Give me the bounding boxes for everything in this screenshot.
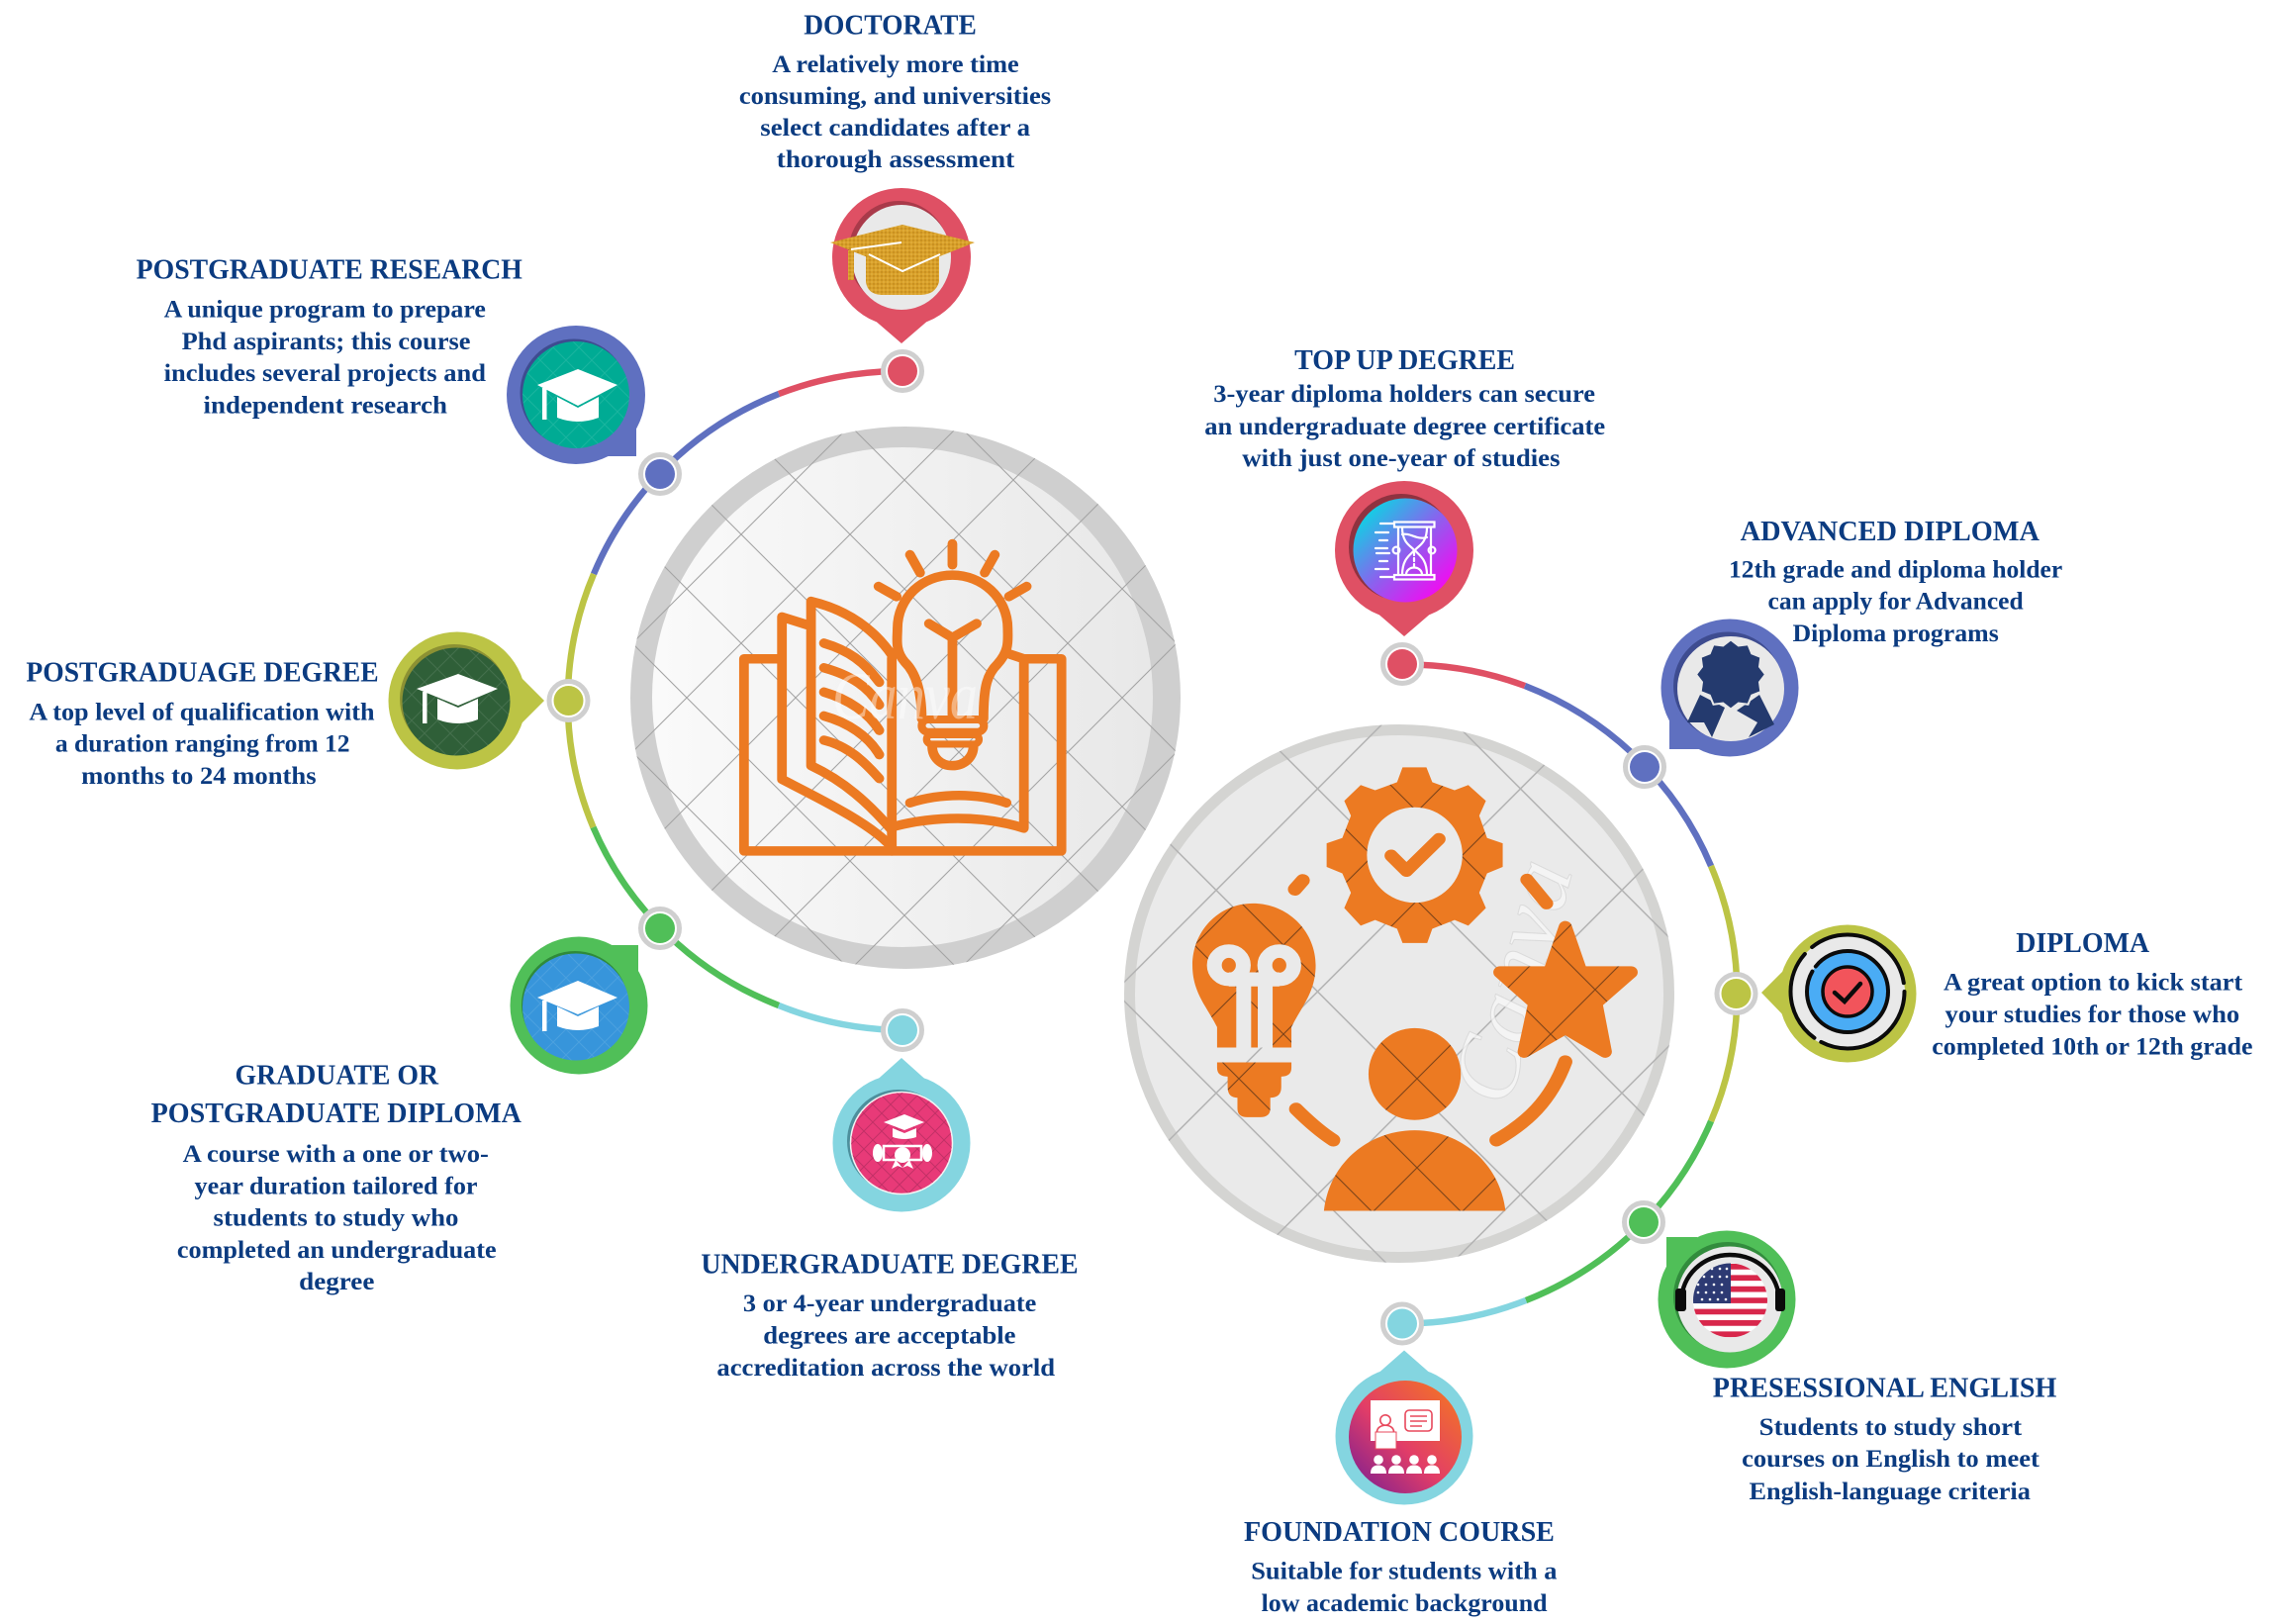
icon: flag in circle xyxy=(1692,1263,1769,1340)
text block: graduate or postgraduate diploma xyxy=(151,1060,522,1295)
text block: postgraduage degree: months to 24 months xyxy=(81,761,317,790)
pin: postgraduate research cap xyxy=(507,326,645,464)
text block: undergraduate degree: degrees are acceptable xyxy=(763,1321,1016,1350)
pin: diploma target xyxy=(1761,924,1916,1063)
text block: postgraduate research: independent research xyxy=(204,390,447,419)
pin: presessional english flag and headset xyxy=(1659,1231,1795,1368)
text block: doctorate: A relatively more time xyxy=(772,49,1019,78)
text block: top up degree: an undergraduate degree certificate xyxy=(1204,412,1605,440)
text block: graduate or postgraduate diploma: completed an undergraduate xyxy=(177,1235,497,1264)
icon: white graduation cap xyxy=(537,369,617,422)
text block: undergraduate degree xyxy=(701,1250,1079,1382)
text block: foundation course: low academic background xyxy=(1262,1588,1548,1617)
text block: postgraduage degree: A top level of qualification with xyxy=(29,697,375,725)
text block: foundation course: Suitable for students with a xyxy=(1251,1557,1558,1585)
pin: foundation course classroom xyxy=(1336,1350,1472,1504)
text block: graduate or postgraduate diploma: POSTGRADUATE DIPLOMA xyxy=(151,1099,522,1129)
text block: doctorate: DOCTORATE xyxy=(804,10,977,41)
text block: presessional english: Students to study short xyxy=(1759,1412,2023,1441)
text block: doctorate xyxy=(739,10,1051,173)
pin: undergraduate degree xyxy=(833,1058,970,1211)
text block: postgraduage degree: POSTGRADUAGE DEGREE xyxy=(26,658,379,689)
text block: doctorate: thorough assessment xyxy=(777,144,1015,173)
icon: gear with check xyxy=(1327,767,1503,943)
text block: diploma: completed 10th or 12th grade xyxy=(1932,1031,2252,1060)
icon: white graduation cap xyxy=(537,981,617,1031)
icon: open book with light bulb xyxy=(744,543,1062,851)
text block: graduate or postgraduate diploma: degree xyxy=(299,1267,374,1295)
text block: presessional english: English-language criteria xyxy=(1750,1477,2031,1505)
text block: postgraduate research: includes several projects and xyxy=(164,358,486,387)
text block: diploma: DIPLOMA xyxy=(2016,928,2149,959)
icon: target with check xyxy=(1791,934,1904,1049)
watermark: Canva: Canva xyxy=(832,658,978,733)
text block: graduate or postgraduate diploma: students to study who xyxy=(214,1202,458,1231)
left timeline arc xyxy=(568,371,902,1030)
text block: top up degree: TOP UP DEGREE xyxy=(1294,345,1515,376)
text block: graduate or postgraduate diploma: GRADUATE OR xyxy=(235,1060,439,1091)
icon: rosette xyxy=(1687,639,1774,737)
text block: doctorate: consuming, and universities xyxy=(739,81,1051,110)
icon: hourglass xyxy=(1375,523,1435,580)
text block: postgraduage degree: a duration ranging from 12 xyxy=(55,729,350,758)
text block: diploma: A great option to kick start xyxy=(1944,967,2243,996)
text block: advanced diploma xyxy=(1729,517,2062,647)
icon: person xyxy=(1324,1028,1505,1211)
icon: classroom teacher and audience xyxy=(1371,1400,1440,1474)
text block: top up degree: with just one-year of studies xyxy=(1242,443,1561,472)
text block: presessional english: courses on English to meet xyxy=(1742,1444,2039,1473)
pin: graduate or postgraduate diploma cap xyxy=(511,936,647,1075)
watermark: Canva rotated: Canva xyxy=(1431,848,1592,1113)
text block: undergraduate degree: UNDERGRADUATE DEGREE xyxy=(701,1250,1079,1281)
pin: postgraduate degree cap xyxy=(388,631,544,770)
text block: doctorate: select candidates after a xyxy=(760,113,1030,142)
text block: advanced diploma: 12th grade and diploma holder xyxy=(1729,554,2062,583)
text block: postgraduage degree xyxy=(26,658,379,790)
text block: postgraduate research xyxy=(137,255,522,419)
text block: graduate or postgraduate diploma: A course with a one or two- xyxy=(183,1139,489,1168)
icon: gear with check, bulb, star and person xyxy=(1192,767,1631,1211)
right timeline arc xyxy=(1402,664,1737,1324)
text block: presessional english xyxy=(1713,1374,2057,1505)
icon: gold graduation cap xyxy=(830,225,975,295)
text block: diploma xyxy=(1932,928,2252,1060)
text block: undergraduate degree: accreditation across the world xyxy=(716,1353,1055,1382)
text block: top up degree xyxy=(1204,345,1605,472)
text block: graduate or postgraduate diploma: year duration tailored for xyxy=(195,1171,478,1199)
pin: advanced diploma rosette xyxy=(1660,620,1799,756)
icon: star xyxy=(1500,927,1631,1052)
text block: undergraduate degree: 3 or 4-year undergraduate xyxy=(743,1289,1036,1317)
pin: top up degree hourglass xyxy=(1335,481,1473,636)
panel: left central circle with book and bulb xyxy=(630,427,1181,969)
icon: cap and scroll xyxy=(873,1114,932,1169)
text block: postgraduate research: Phd aspirants; this course xyxy=(182,327,470,355)
icon: headset xyxy=(1675,1255,1785,1311)
text block: foundation course: FOUNDATION COURSE xyxy=(1244,1517,1555,1548)
text block: presessional english: PRESESSIONAL ENGLISH xyxy=(1713,1374,2057,1404)
icon: connecting dashes xyxy=(1295,880,1565,1140)
icon: white graduation cap xyxy=(417,674,498,723)
panel: right central circle with person, skills icons xyxy=(1124,724,1674,1263)
text block: diploma: your studies for those who xyxy=(1944,1000,2239,1028)
text block: foundation course xyxy=(1244,1517,1558,1617)
text block: advanced diploma: Diploma programs xyxy=(1793,619,1999,647)
text block: advanced diploma: can apply for Advanced xyxy=(1768,587,2024,616)
text block: advanced diploma: ADVANCED DIPLOMA xyxy=(1741,517,2039,547)
timeline nodes xyxy=(549,352,1755,1343)
text block: top up degree: 3-year diploma holders can secure xyxy=(1213,379,1595,408)
text block: postgraduate research: POSTGRADUATE RESEARCH xyxy=(137,255,522,286)
pin: doctorate gold cap xyxy=(830,188,975,343)
icon: solid light bulb xyxy=(1192,904,1316,1117)
text block: postgraduate research: A unique program to prepare xyxy=(164,294,486,323)
